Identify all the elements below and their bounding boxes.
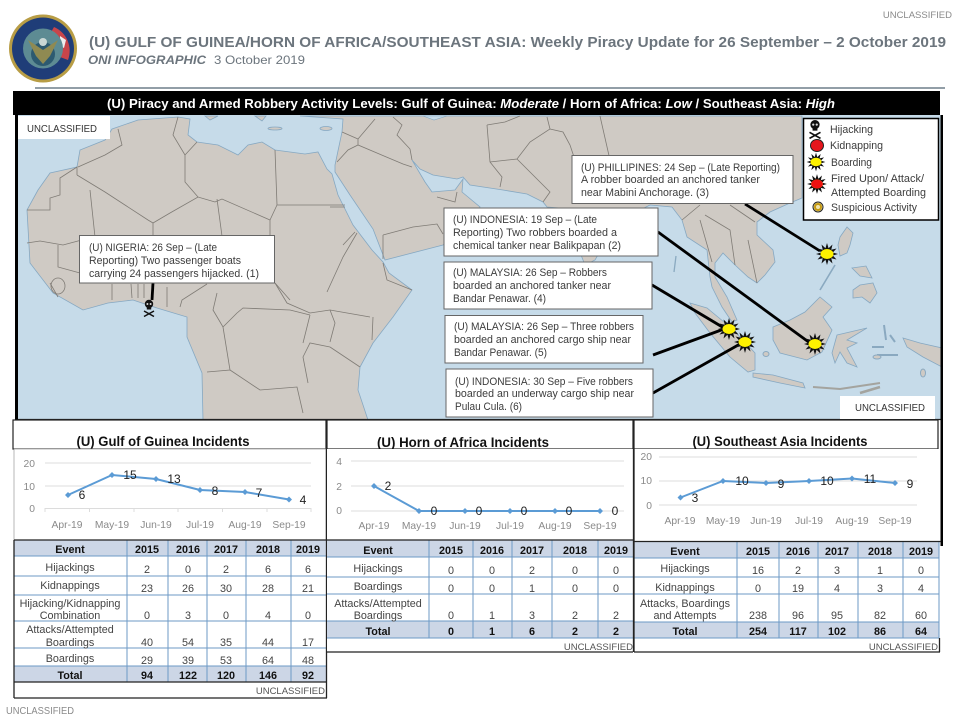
table: Gulf of Guinea: 44	[262, 637, 274, 649]
table: Gulf of Guinea: 0	[144, 610, 150, 622]
table: Southeast Asia: 16	[752, 565, 764, 577]
line chart: Southeast Asia: 9	[778, 477, 785, 491]
callout: Indonesia Pulau Cula	[446, 369, 653, 417]
table: Southeast Asia: 117	[789, 626, 807, 638]
table: Southeast Asia: Hijackings	[660, 563, 710, 575]
table: Gulf of Guinea: 39	[182, 655, 194, 667]
table: Gulf of Guinea: 120	[217, 670, 235, 682]
table: Horn of Africa: 0	[572, 583, 578, 595]
arrow: Indonesia Pulau Cula leader	[653, 344, 740, 393]
line chart: Gulf of Guinea: Jun-19	[140, 520, 172, 531]
table: Gulf of Guinea: 40	[141, 637, 153, 649]
table: Gulf of Guinea: 122	[179, 670, 197, 682]
line chart: Southeast Asia: Jul-19	[795, 516, 823, 527]
table: Southeast Asia: 86	[874, 626, 886, 638]
table: Southeast Asia: 0	[918, 565, 924, 577]
table: Southeast Asia: 2018	[868, 546, 892, 558]
callout: Indonesia Pulau Cula: boarded an underway cargo ship near	[455, 388, 634, 400]
line chart: Gulf of Guinea: 0	[29, 504, 35, 515]
table: Gulf of Guinea: 21	[302, 583, 314, 595]
callout: Malaysia tanker	[444, 262, 652, 309]
line chart: Horn of Africa: Jun-19	[449, 521, 481, 532]
table: Gulf of Guinea	[14, 449, 327, 698]
map marking: top left: UNCLASSIFIED	[27, 123, 97, 135]
table: Gulf of Guinea: Event	[55, 544, 85, 556]
callout: Malaysia tanker: boarded an anchored tanker near	[453, 280, 611, 292]
table: Gulf of Guinea: Combination	[40, 610, 100, 622]
callout: Philippines: (U) PHILLIPINES: 24 Sep – (Late Reporting)	[581, 162, 780, 174]
table: Southeast Asia: and Attempts	[653, 610, 717, 622]
table: Gulf of Guinea: Boardings	[46, 653, 95, 665]
callout: Malaysia tanker: Bandar Penawar. (4)	[453, 293, 546, 305]
line chart: Southeast Asia: Sep-19	[878, 516, 912, 527]
table: Horn of Africa: 0	[448, 610, 454, 622]
table: Gulf of Guinea: 4	[265, 610, 271, 622]
line chart: Gulf of Guinea: 10	[24, 482, 35, 493]
table: Horn of Africa: Total	[366, 626, 390, 638]
line chart: Horn of Africa: 0	[566, 504, 573, 518]
arrow: Malaysia cargo leader	[653, 329, 724, 355]
line chart: Gulf of Guinea: Aug-19	[228, 520, 262, 531]
table: Gulf of Guinea: 2018	[256, 544, 280, 556]
map marking: bottom right	[840, 396, 935, 419]
arrow: Nigeria leader	[152, 283, 153, 300]
callout: Malaysia cargo: (U) MALAYSIA: 26 Sep – Three robbers	[454, 321, 635, 333]
line chart: Gulf of Guinea: 15	[123, 468, 137, 482]
legend: Boarding	[831, 157, 872, 169]
table: Horn of Africa: 3	[529, 610, 535, 622]
table: Horn of Africa: UNCLASSIFIED	[564, 642, 633, 653]
country borders	[77, 175, 270, 223]
table: Horn of Africa: 0	[448, 626, 454, 638]
heading: Gulf of Guinea	[13, 420, 326, 449]
line chart: Gulf of Guinea: 13	[167, 472, 181, 486]
line chart: Horn of Africa: 0	[476, 504, 483, 518]
table: Horn of Africa: 0	[489, 565, 495, 577]
table: Horn of Africa	[327, 449, 634, 653]
table: Gulf of Guinea: 28	[262, 583, 274, 595]
table: Gulf of Guinea: Boardings	[46, 637, 95, 649]
table: Southeast Asia: Kidnappings	[655, 582, 715, 594]
line chart: Horn of Africa: 0	[336, 506, 342, 517]
line chart: Horn of Africa: 0	[612, 504, 619, 518]
table: Gulf of Guinea: 146	[259, 670, 277, 682]
table: Southeast Asia: 64	[915, 626, 927, 638]
line chart: Southeast Asia: Apr-19	[665, 516, 696, 527]
table: Southeast Asia: 2016	[786, 546, 810, 558]
table: Horn of Africa: 2016	[480, 545, 504, 557]
line chart: Horn of Africa	[327, 449, 633, 540]
heading: Southeast Asia	[634, 420, 938, 449]
callout: Nigeria	[80, 236, 274, 283]
line chart: Horn of Africa: 2	[385, 479, 392, 493]
line chart: Southeast Asia: 3	[692, 491, 699, 505]
callout: Nigeria: carrying 24 passengers hijacked. (1)	[89, 268, 259, 280]
callout: Philippines: A robber boarded an anchored tanker	[581, 174, 760, 186]
table: Horn of Africa: 2018	[563, 545, 587, 557]
table: Gulf of Guinea: 29	[141, 655, 153, 667]
table: Gulf of Guinea: 3	[185, 610, 191, 622]
table: Gulf of Guinea: 0	[223, 610, 229, 622]
icon: boarding Malaysia	[718, 318, 740, 340]
line chart: Southeast Asia: May-19	[706, 516, 740, 527]
line chart: Horn of Africa: Aug-19	[538, 521, 572, 532]
line chart: Horn of Africa: May-19	[402, 521, 436, 532]
icon: boarding Sumatra	[734, 331, 756, 353]
callout: Philippines: near Mabini Anchorage. (3)	[581, 187, 709, 199]
table: Gulf of Guinea: Hijacking/Kidnapping	[20, 598, 120, 610]
table: Gulf of Guinea: 23	[141, 583, 153, 595]
panel: Southeast Asia	[634, 420, 941, 653]
table: Horn of Africa: 2	[529, 565, 535, 577]
line chart: Southeast Asia: Jun-19	[750, 516, 782, 527]
panel: map	[17, 115, 942, 420]
line chart: Gulf of Guinea: 6	[79, 488, 86, 502]
table: Southeast Asia: 2017	[825, 546, 849, 558]
table: Gulf of Guinea: Total	[58, 670, 82, 682]
heading: Gulf of Guinea: (U) Gulf of Guinea Incidents	[76, 434, 250, 449]
table: Horn of Africa: 0	[613, 583, 619, 595]
table: Southeast Asia: 3	[877, 583, 883, 595]
line chart: Horn of Africa: Jul-19	[496, 521, 524, 532]
table: Horn of Africa: 2017	[520, 545, 544, 557]
table: Horn of Africa: 0	[448, 583, 454, 595]
table: Horn of Africa: 1	[489, 626, 495, 638]
table: Gulf of Guinea: 2016	[176, 544, 200, 556]
table: Gulf of Guinea: 2	[144, 564, 150, 576]
line chart: Southeast Asia	[634, 449, 939, 542]
table: Horn of Africa: 2	[613, 610, 619, 622]
table: Southeast Asia: 2	[795, 565, 801, 577]
line chart: Southeast Asia: 11	[864, 472, 877, 486]
line chart: Gulf of Guinea: Apr-19	[52, 520, 83, 531]
line chart: Horn of Africa: Apr-19	[359, 521, 390, 532]
panel: Gulf of Guinea	[13, 420, 327, 698]
table: Gulf of Guinea: 6	[265, 564, 271, 576]
arrow: Malaysia tanker leader	[652, 285, 724, 328]
callout: Malaysia tanker: (U) MALAYSIA: 26 Sep – Robbers	[453, 267, 608, 279]
callout: Indonesia Pulau Cula: Pulau Cula. (6)	[455, 401, 522, 413]
callout: Nigeria: (U) NIGERIA: 26 Sep – (Late	[89, 242, 217, 254]
table: Horn of Africa: 2015	[439, 545, 463, 557]
table: Southeast Asia: 60	[915, 610, 927, 622]
table: Horn of Africa: Event	[363, 545, 393, 557]
table: Gulf of Guinea: 54	[182, 637, 194, 649]
legend: Attempted Boarding	[831, 187, 926, 199]
table: Horn of Africa: 2	[613, 626, 619, 638]
table: Gulf of Guinea: Hijackings	[45, 562, 95, 574]
table: Gulf of Guinea: 53	[220, 655, 232, 667]
table: Gulf of Guinea: 2015	[135, 544, 159, 556]
table: Southeast Asia: 102	[828, 626, 846, 638]
table: Gulf of Guinea: UNCLASSIFIED	[256, 686, 325, 697]
arrow: Indonesia Balikpapan leader	[658, 232, 810, 343]
table: Southeast Asia: 254	[749, 626, 767, 638]
table: Gulf of Guinea: Attacks/Attempted	[26, 624, 114, 636]
table: Gulf of Guinea: 0	[185, 564, 191, 576]
callout: Philippines	[572, 156, 793, 204]
table: Horn of Africa: 1	[489, 610, 495, 622]
callout: Indonesia Balikpapan	[444, 208, 658, 256]
line chart: Southeast Asia: Aug-19	[835, 516, 869, 527]
table: Southeast Asia: 19	[792, 583, 804, 595]
table: Southeast Asia: 95	[831, 610, 843, 622]
line chart: Horn of Africa: Sep-19	[583, 521, 617, 532]
line chart: Southeast Asia: 0	[646, 501, 652, 512]
table: Horn of Africa: Boardings	[354, 610, 403, 622]
icon: hijacking Nigeria	[144, 300, 154, 316]
line chart: Horn of Africa: 0	[521, 504, 528, 518]
top classification marking: UNCLASSIFIED	[883, 10, 952, 21]
line chart: Southeast Asia: 10	[820, 474, 834, 488]
panel: Horn of Africa	[327, 420, 634, 653]
table: Southeast Asia: 0	[755, 583, 761, 595]
line chart: Horn of Africa: 2	[336, 482, 342, 493]
table: Horn of Africa: Boardings	[354, 581, 403, 593]
legend: Suspicious Activity	[831, 202, 918, 214]
table: Horn of Africa: Attacks/Attempted	[334, 598, 422, 610]
table: Southeast Asia: Event	[670, 546, 700, 558]
table: Horn of Africa: 0	[572, 565, 578, 577]
table: Southeast Asia: Attacks, Boardings	[640, 598, 731, 610]
callout: Indonesia Balikpapan: (U) INDONESIA: 19 Sep – (Late	[453, 214, 597, 226]
line chart: Southeast Asia: 9	[907, 477, 914, 491]
header bar	[13, 91, 940, 115]
legend: Kidnapping	[830, 140, 883, 152]
line chart: Southeast Asia: 10	[641, 476, 652, 487]
legend: Fired Upon/ Attack/	[831, 173, 924, 185]
table: Horn of Africa: 2019	[604, 545, 628, 557]
table: Southeast Asia: 4	[834, 583, 840, 595]
line chart: Gulf of Guinea: 8	[212, 484, 219, 498]
callout: Indonesia Balikpapan: chemical tanker near Balikpapan (2)	[453, 240, 621, 252]
table: Horn of Africa: 2	[572, 610, 578, 622]
table: Gulf of Guinea: 94	[141, 670, 153, 682]
title: 3 October 2019	[214, 53, 305, 67]
table: Southeast Asia: 96	[792, 610, 804, 622]
table: Gulf of Guinea: 35	[220, 637, 232, 649]
title: ONI INFOGRAPHIC	[88, 53, 206, 67]
table: Gulf of Guinea: 92	[302, 670, 314, 682]
table: Horn of Africa: 0	[448, 565, 454, 577]
table: Gulf of Guinea: 2019	[296, 544, 320, 556]
line chart: Gulf of Guinea: 20	[24, 459, 35, 470]
heading: Horn of Africa	[327, 420, 633, 450]
table: Gulf of Guinea: 17	[302, 637, 314, 649]
table: Southeast Asia: 82	[874, 610, 886, 622]
line chart: Horn of Africa: 0	[431, 504, 438, 518]
callout: Nigeria: Reporting) Two passenger boats	[89, 255, 242, 267]
table: Horn of Africa: 2	[572, 626, 578, 638]
legend	[804, 118, 938, 220]
table: Gulf of Guinea: 2	[223, 564, 229, 576]
table: Horn of Africa: 0	[489, 583, 495, 595]
arrow: Philippines leader	[745, 204, 820, 251]
icon: boarding Balikpapan	[804, 333, 826, 355]
title: (U) GULF OF GUINEA/HORN OF AFRICA/SOUTHEAST ASIA: Weekly Piracy Update for 26 September – 2 October 2019	[89, 34, 946, 51]
icon: boarding Philippines	[816, 243, 838, 265]
table: Gulf of Guinea: 30	[220, 583, 232, 595]
table: Southeast Asia: Total	[672, 626, 698, 638]
table: Horn of Africa: 1	[529, 583, 535, 595]
callout: Indonesia Pulau Cula: (U) INDONESIA: 30 Sep – Five robbers	[455, 376, 634, 388]
table: Gulf of Guinea: 2017	[214, 544, 238, 556]
table: Southeast Asia: UNCLASSIFIED	[869, 642, 938, 653]
line chart: Southeast Asia: 10	[735, 474, 749, 488]
callout: Malaysia cargo	[445, 316, 643, 363]
line chart: Gulf of Guinea	[14, 449, 326, 540]
header bar: (U) Piracy and Armed Robbery Activity Levels: Gulf of Guinea: Moderate / Horn of Africa: Low / Southeast Asia: High	[107, 96, 835, 111]
legend: Hijacking	[830, 124, 873, 136]
table: Horn of Africa: 6	[529, 626, 535, 638]
icon: ONI seal	[9, 14, 77, 82]
map marking: top left	[18, 116, 110, 139]
table: Southeast Asia: 238	[749, 610, 767, 622]
title	[88, 34, 946, 67]
table: Gulf of Guinea: 26	[182, 583, 194, 595]
line chart: Gulf of Guinea: 4	[300, 493, 307, 507]
line chart: Southeast Asia: 20	[641, 452, 652, 463]
line chart: Gulf of Guinea: Jul-19	[186, 520, 214, 531]
line chart: Horn of Africa: 4	[336, 457, 342, 468]
table: Gulf of Guinea: 0	[305, 610, 311, 622]
table: Southeast Asia: 4	[918, 583, 924, 595]
table: Gulf of Guinea: 48	[302, 655, 314, 667]
table: Southeast Asia: 2015	[746, 546, 770, 558]
footer classification marking: UNCLASSIFIED	[6, 706, 74, 717]
table: Gulf of Guinea: 6	[305, 564, 311, 576]
table: Southeast Asia	[634, 449, 941, 653]
line chart: Gulf of Guinea: May-19	[95, 520, 129, 531]
table: Gulf of Guinea: Kidnappings	[40, 580, 100, 592]
map marking: bottom right: UNCLASSIFIED	[855, 402, 925, 414]
table: Southeast Asia: 2019	[909, 546, 933, 558]
callout: Indonesia Balikpapan: Reporting) Two robbers boarded a	[453, 227, 617, 239]
table: Horn of Africa: Hijackings	[353, 563, 403, 575]
table: Southeast Asia: 3	[834, 565, 840, 577]
table: Horn of Africa: 0	[613, 565, 619, 577]
table: Gulf of Guinea: 64	[262, 655, 274, 667]
table: Southeast Asia: 1	[877, 565, 883, 577]
heading: Horn of Africa: (U) Horn of Africa Incidents	[377, 435, 549, 450]
heading: Southeast Asia: (U) Southeast Asia Incidents	[692, 434, 868, 449]
line chart: Gulf of Guinea: 7	[256, 486, 263, 500]
callout: Malaysia cargo: boarded an anchored cargo ship near	[454, 334, 631, 346]
callout: Malaysia cargo: Bandar Penawar. (5)	[454, 347, 547, 359]
line chart: Gulf of Guinea: Sep-19	[272, 520, 306, 531]
